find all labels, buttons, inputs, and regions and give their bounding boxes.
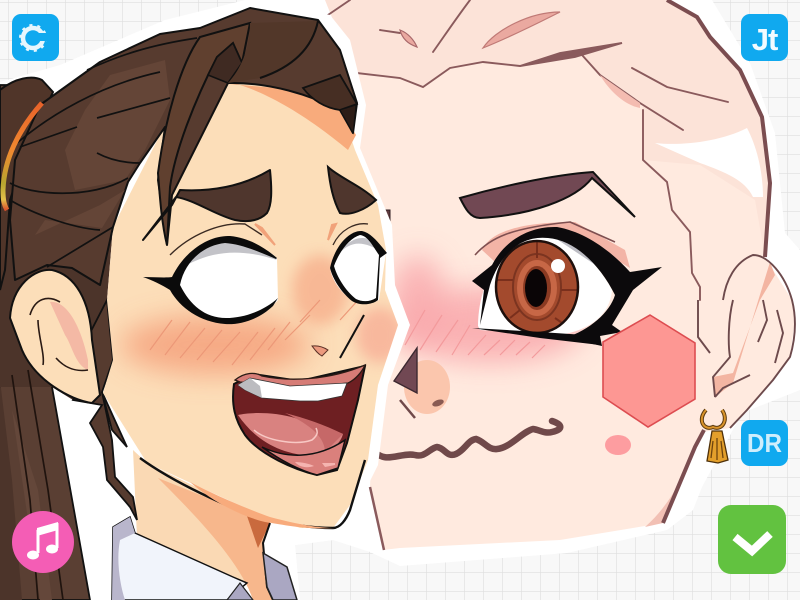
- left character: [0, 8, 404, 600]
- icon: green check button: [718, 505, 786, 574]
- forehead marks: [483, 12, 560, 48]
- nose-side crease marks: [255, 224, 275, 245]
- pupil: [525, 269, 547, 307]
- eye left: [143, 224, 336, 324]
- nose line: [340, 315, 364, 358]
- lower lash: [472, 328, 600, 345]
- white outline of left character: [0, 0, 410, 600]
- temple shadow: [168, 84, 222, 196]
- eye right: [472, 222, 662, 346]
- eyebrow right: [460, 172, 635, 218]
- hair highlight: [65, 60, 170, 190]
- back hair strands: [12, 370, 63, 600]
- upper lip: [235, 365, 365, 388]
- icon: DR badge: DR: [747, 428, 782, 458]
- hair lower highlight: [35, 190, 125, 235]
- blush hatching left: [150, 298, 360, 365]
- gear teeth: [20, 26, 46, 50]
- hair bun: [0, 78, 53, 290]
- hairline creases: [325, 0, 728, 300]
- gear C body: [23, 28, 43, 48]
- nose: [394, 348, 450, 418]
- braid: [73, 300, 137, 520]
- eye crease: [475, 222, 615, 255]
- head upper shading: [326, 2, 332, 16]
- lip highlight: [295, 462, 335, 467]
- sclera: [478, 236, 612, 335]
- inner ear shade: [713, 262, 775, 397]
- teeth: [238, 378, 347, 401]
- forehead shadow: [217, 83, 356, 150]
- eyelid shade: [482, 222, 630, 268]
- teeth shade: [238, 378, 262, 398]
- chin edge stroke: [370, 487, 384, 550]
- head white highlight: [655, 128, 763, 197]
- eye right of left face: [330, 224, 387, 304]
- right eyebrow L: [328, 167, 376, 214]
- sclera shadow: [555, 238, 618, 292]
- head outline: [667, 0, 770, 257]
- ear left: [10, 270, 100, 403]
- crease shadow: [600, 75, 640, 108]
- eye crease: [170, 224, 262, 255]
- ear right: [698, 255, 795, 428]
- tongue shade: [285, 413, 343, 452]
- blush hatching: [405, 310, 545, 358]
- right face: [325, 0, 795, 550]
- eye shadow: [178, 238, 277, 270]
- eye highlight: [551, 259, 565, 273]
- lower fringe: [303, 75, 357, 110]
- hexagon patch: [603, 315, 695, 427]
- eye white: [170, 238, 278, 323]
- small dark marker: [381, 210, 390, 232]
- icon: gear C badge: [12, 14, 59, 61]
- mouth: [233, 365, 365, 475]
- cheek dot: [605, 435, 631, 455]
- main hair: [10, 8, 357, 285]
- upper lash: [472, 227, 662, 346]
- C opening: [38, 33, 50, 41]
- eye outline: [143, 236, 278, 324]
- icon: pink music note: [12, 511, 74, 573]
- right fringe: [228, 21, 318, 83]
- fringe line: [260, 21, 318, 78]
- iris: [497, 242, 577, 332]
- jaw shade: [645, 447, 695, 527]
- tongue: [238, 413, 343, 456]
- right cheek blush: [395, 287, 585, 363]
- tongue line: [254, 428, 317, 442]
- back hair highlight: [12, 410, 52, 600]
- nose: [312, 346, 328, 356]
- left cheek blush: [120, 255, 404, 375]
- lower lip: [262, 440, 345, 475]
- long back hair: [0, 85, 90, 600]
- icon: Jt badge: Jt: [752, 22, 778, 57]
- hair strand lines: [10, 38, 197, 267]
- front hair lock: [158, 23, 250, 245]
- wavy mouth: [373, 421, 560, 457]
- braid lower segment: [102, 392, 127, 447]
- jaw shadow: [190, 482, 335, 528]
- fringe tip: [340, 105, 356, 133]
- ear strokes: [698, 255, 795, 428]
- jaw outline: [663, 430, 704, 523]
- inner dark fringe: [208, 43, 242, 83]
- neck: [133, 450, 273, 600]
- icon: DR badge: [741, 420, 788, 466]
- jaw line: [140, 458, 365, 528]
- back hair shade: [0, 380, 22, 600]
- hair behind ear: [0, 225, 113, 400]
- shirt: [112, 517, 297, 600]
- face skin: [103, 80, 398, 528]
- icon: Jt badge: [741, 14, 788, 61]
- earring: [702, 410, 728, 463]
- mouth interior: [233, 366, 365, 475]
- hair mass: [10, 8, 357, 285]
- left eyebrow L: [143, 170, 271, 240]
- hair band: [3, 103, 42, 210]
- right face skin: [325, 0, 795, 550]
